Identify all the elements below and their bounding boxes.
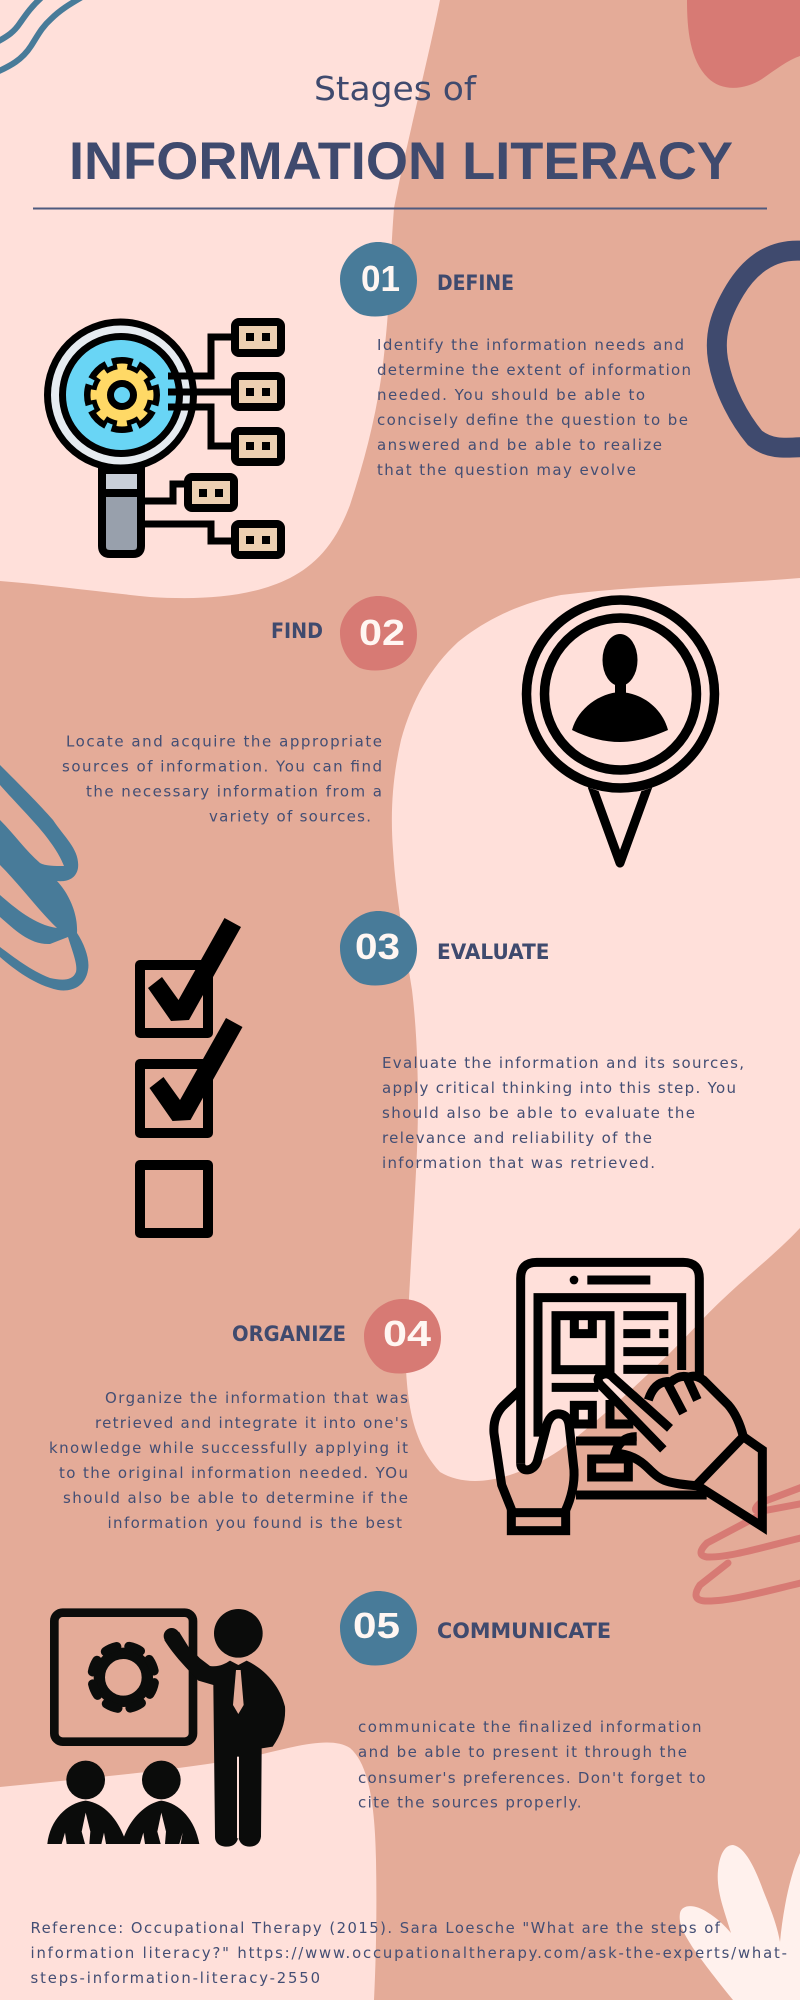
screen frame [538,1298,682,1437]
text: find description: variety of sources. [209,808,371,826]
badge 01 [340,242,417,317]
text: find description: sources of information. You can find [62,758,382,776]
text: organize description: retrieved and integrate it into one's [95,1414,408,1432]
reference text: steps-information-literacy-2550 [30,1970,320,1987]
step 02 [62,596,417,826]
text: organize description [49,1389,408,1532]
text: organize description: should also be able to determine if the [63,1489,408,1507]
left hand [494,1390,574,1531]
icon: magnifier with data boxes [48,322,281,555]
text: define description: Identify the information needs and [377,336,684,354]
icon: hand on tablet [494,1262,762,1531]
outer ring [526,600,714,788]
heading: ORGANIZE: ORGANIZE [232,1322,346,1346]
heading: COMMUNICATE: COMMUNICATE [437,1619,611,1643]
text: find description: the necessary information from a [86,782,382,800]
text: evaluate description: relevance and reliability of the [382,1129,652,1147]
checkbox 1 [140,965,208,1033]
handle [102,470,141,554]
text: organize description: to the original information needed. YOu [59,1464,408,1482]
icon: location pin with person [526,600,714,863]
data boxes [188,322,281,555]
text: communicate description: consumer's preferences. Don't forget to [358,1769,706,1787]
gear [89,362,155,428]
decoration: blue squiggles top-left [0,0,82,72]
title: Stages of: Stages of [314,69,477,108]
text: communicate description: and be able to present it through the [358,1743,687,1761]
text: define description [377,336,691,479]
decoration: coral scribble right [696,1486,800,1601]
right hand [598,1374,743,1486]
check 2 [150,1018,242,1121]
person [572,634,668,742]
text: organize description: knowledge while successfully applying it [49,1439,408,1457]
badge 04: 04 [383,1313,431,1354]
decoration: white leaves [680,1845,800,2000]
badge 02: 02 [359,612,405,653]
pin tail [592,786,648,863]
speaker [570,1276,650,1284]
text: organize description: Organize the information that was [105,1389,408,1407]
step 01 [340,242,691,479]
checkbox 3 [140,1165,208,1233]
text: define description: concisely define the question to be [377,411,688,429]
heading: DEFINE: DEFINE [437,271,514,295]
lens [48,322,197,468]
title: INFORMATION LITERACY: INFORMATION LITERACY [69,132,733,191]
step 03 [340,911,744,1172]
text: communicate description: cite the sources properly. [358,1794,582,1812]
text: organize description: information you found is the best [108,1514,402,1532]
text: find description: Locate and acquire the appropriate [66,732,382,750]
check 1 [148,918,241,1021]
gear [87,1641,160,1714]
badge 03 [340,911,417,986]
text: evaluate description: information that was retrieved. [382,1154,655,1172]
heading: EVALUATE: EVALUATE [437,940,550,964]
text: define description: answered and be able to realize [377,436,662,454]
text: evaluate description: Evaluate the information and its sources, [382,1054,744,1072]
inner ring [544,618,696,770]
tablet body [521,1262,699,1463]
screen content [552,1316,707,1495]
text: evaluate description: apply critical thinking into this step. You [382,1079,736,1097]
badge 03: 03 [355,926,400,967]
decoration: coral blob [687,0,800,88]
badge 02 [340,596,417,671]
checkbox 2 [140,1064,208,1133]
decoration: navy ring [717,251,800,448]
text: communicate description: communicate the finalized information [358,1718,702,1736]
connector lines [145,337,235,541]
badge 05 [340,1591,417,1666]
text: communicate description [358,1718,706,1812]
box dots [199,333,270,544]
title divider [33,208,767,210]
badge 01: 01 [361,258,400,299]
text: define description: determine the extent of information [377,361,691,379]
presenter [164,1609,285,1847]
board [54,1613,193,1742]
step 04 [49,1299,441,1532]
reference text: Reference: Occupational Therapy (2015). Sara Loesche "What are the steps of [30,1920,721,1937]
reference text: information literacy?" https://www.occupationaltherapy.com/ask-the-experts/what- [30,1945,787,1962]
audience [47,1761,199,1844]
badge 05: 05 [353,1605,400,1646]
icon: checklist [140,918,242,1233]
cuff [697,1437,762,1527]
decoration: blue scribble left [0,765,88,990]
reference text [30,1920,787,1987]
text: evaluate description [382,1054,744,1172]
text: define description: needed. You should be able to [377,386,645,404]
text: define description: that the question may evolve [377,461,636,479]
heading: FIND: FIND [271,619,323,643]
icon: presenter with audience [47,1609,285,1847]
text: evaluate description: should also be able to evaluate the [382,1104,695,1122]
text: find description [62,732,382,826]
badge 04 [364,1299,441,1374]
step 05 [340,1591,706,1812]
